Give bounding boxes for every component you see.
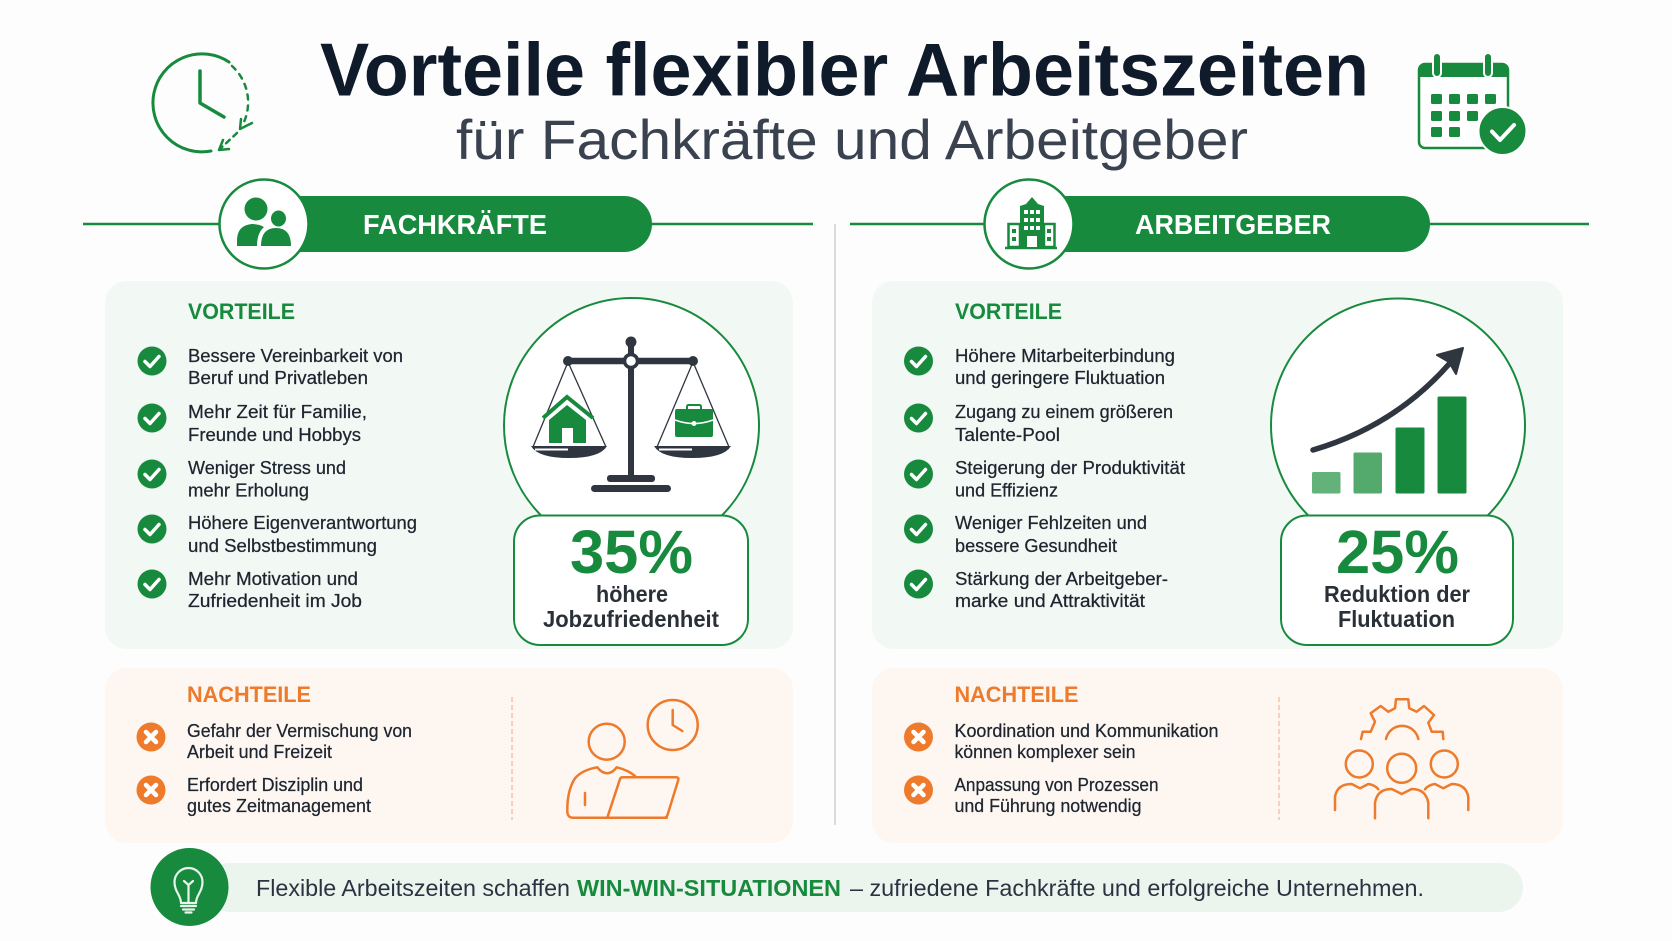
item: Koordination: können komplexer sein [954,741,1136,762]
item: Vereinbarkeit: Beruf und Privatleben [188,367,368,388]
item: Mitarbeiterbindung: Höhere Mitarbeiterbindung [955,345,1175,366]
icon: team with gear [1335,699,1468,818]
section header: Fachkräfte: FACHKRÄFTE [363,209,547,240]
item: Weniger Stress: Weniger Stress und [188,457,346,478]
stat box: 35%: 35% [570,518,693,586]
item: Talente-Pool: Zugang zu einem größeren [955,401,1173,422]
stat box: 25%: 25% [1336,518,1459,586]
subtitle: für Fachkräfte und Arbeitgeber [456,108,1248,171]
item: Mitarbeiterbindung: und geringere Fluktuation [955,367,1165,388]
item: Vermischung: Arbeit und Freizeit [187,741,332,762]
stat box: 25%: Fluktuation [1338,606,1455,632]
icon: calendar with check [1419,53,1526,155]
item: Eigenverantwortung: und Selbstbestimmung [188,535,377,556]
item: Weniger Stress [138,457,346,500]
icon: person at laptop with clock [567,700,698,818]
icon: clock with dashed arrows [153,54,252,152]
item: Arbeitgebermarke [904,568,1168,611]
item: Talente-Pool: Talente-Pool [955,424,1060,445]
callout: bottom takeaway: WIN-WIN-SITUATIONEN [577,875,841,901]
item: Arbeitgebermarke: Stärkung der Arbeitgeber- [955,568,1168,589]
item: Arbeitgebermarke: marke und Attraktivität [955,590,1145,611]
heading: Nachteile: NACHTEILE [954,682,1078,707]
panel: Vorteile Fachkräfte [105,281,793,649]
item: Prozesse: Anpassung von Prozessen [954,774,1158,795]
item: Prozesse: und Führung notwendig [954,795,1142,816]
item: Eigenverantwortung: Höhere Eigenverantwortung [188,512,417,533]
dashed divider [1278,697,1280,820]
callout: bottom takeaway: – zufriedene Fachkräfte und erfolgreiche Unternehmen. [850,875,1424,901]
icon: people [237,198,291,246]
arrow: growth [1313,348,1463,450]
item: Fehlzeiten: bessere Gesundheit [955,535,1117,556]
section header: Arbeitgeber: ARBEITGEBER [1135,209,1331,240]
item: Eigenverantwortung [138,512,417,556]
item: Vermischung: Gefahr der Vermischung von [187,720,412,741]
panel: Nachteile Fachkräfte [105,668,793,843]
callout: bottom takeaway [150,848,1523,926]
dashed divider [511,697,513,820]
heading: Vorteile: VORTEILE [188,299,295,324]
item: Weniger Stress: mehr Erholung [188,480,309,500]
heading: Vorteile: VORTEILE [955,299,1062,324]
panel: Nachteile Arbeitgeber [872,668,1563,843]
item: Prozesse [904,774,1158,816]
item: Talente-Pool [904,401,1173,445]
icon: light bulb [174,868,202,912]
icon: briefcase [675,405,713,437]
item: Koordination: Koordination und Kommunikation [954,720,1218,741]
item: Disziplin [136,774,371,816]
stat box: 35%: Jobzufriedenheit [543,606,719,632]
panel: Vorteile Arbeitgeber [872,281,1563,649]
item: Mehr Zeit [138,401,367,445]
section header: Fachkräfte [83,180,813,268]
icon: office building [1005,197,1057,248]
item: Mehr Zeit: Mehr Zeit für Familie, [188,401,367,422]
item: Vermischung [136,720,412,762]
item: Motivation [138,568,362,611]
illustration circle with growth chart [1271,298,1525,552]
item: Fehlzeiten: Weniger Fehlzeiten und [955,512,1147,533]
item: Produktivität: Steigerung der Produktivität [955,457,1185,478]
heading: Nachteile: NACHTEILE [187,682,311,707]
section header: Arbeitgeber [850,180,1589,268]
stat box: 35% [514,516,748,645]
item: Mitarbeiterbindung [904,345,1175,388]
stat box: 25% [1281,516,1513,645]
callout: bottom takeaway: Flexible Arbeitszeiten schaffen [256,875,570,901]
item: Disziplin: gutes Zeitmanagement [187,795,371,816]
title: Vorteile flexibler Arbeitszeiten [320,28,1369,112]
item: Fehlzeiten [904,512,1147,556]
divider [834,224,836,825]
item: Mehr Zeit: Freunde und Hobbys [188,424,361,445]
illustration circle with scale [504,298,759,553]
item: Koordination [904,720,1218,762]
item: Produktivität [904,457,1185,500]
item: Motivation: Zufriedenheit im Job [188,590,362,611]
bar chart [1312,396,1466,494]
item: Disziplin: Erfordert Disziplin und [187,774,363,795]
item: Motivation: Mehr Motivation und [188,568,358,589]
item: Vereinbarkeit [138,345,403,388]
stat box: 25%: Reduktion der [1324,581,1470,607]
item: Produktivität: und Effizienz [955,480,1058,500]
item: Vereinbarkeit: Bessere Vereinbarkeit von [188,345,403,366]
icon: house [543,397,593,443]
stat box: 35%: höhere [596,581,668,607]
